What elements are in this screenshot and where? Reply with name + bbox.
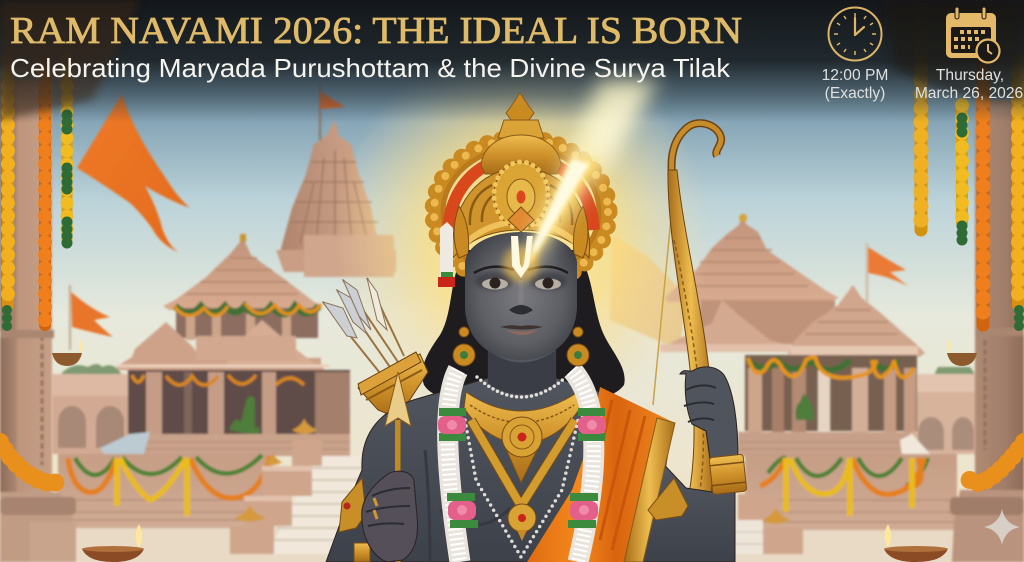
flag: tower top	[320, 84, 345, 140]
hair	[422, 250, 625, 398]
right top dark canopy	[885, 0, 1024, 100]
crown band	[458, 222, 584, 251]
marigold bunch left	[0, 442, 62, 483]
colonnade right temple	[745, 355, 917, 432]
lower pavilion and side roof	[116, 320, 330, 370]
platform right	[738, 432, 932, 456]
tilak mark	[503, 236, 539, 282]
crown scrollwork	[470, 185, 572, 225]
brass lamp right	[762, 508, 790, 524]
upper wall right	[700, 300, 835, 350]
main shikhara tower	[276, 120, 396, 277]
steps left	[267, 456, 362, 554]
diya lamp bottom right	[884, 524, 948, 562]
flower garland left	[438, 370, 478, 562]
gem sparkle watermark	[984, 509, 1020, 545]
marigold bunch right	[968, 442, 1024, 483]
bow and string	[653, 123, 721, 562]
short pearl choker	[477, 377, 566, 397]
halo scallop ring	[433, 138, 609, 286]
step posts right	[738, 494, 803, 554]
text: time: (Exactly)	[825, 85, 885, 102]
crown finial	[498, 93, 544, 138]
potted plant left	[229, 396, 260, 452]
top dark shade	[0, 0, 1024, 122]
face	[465, 232, 577, 360]
right hand	[680, 367, 738, 459]
crown side ornaments	[454, 206, 588, 258]
diya lamp small left	[52, 340, 82, 366]
flag: right	[867, 243, 908, 302]
text: date: Thursday,	[936, 67, 1004, 84]
left armband	[339, 478, 366, 532]
far building right	[905, 374, 977, 454]
left bracelet	[354, 543, 370, 562]
earrings	[453, 327, 589, 366]
arrows in quiver	[323, 278, 404, 378]
glow behind head	[332, 40, 712, 430]
eyebrows	[474, 267, 568, 273]
icon: clock	[828, 8, 882, 60]
text: date	[915, 67, 1023, 102]
chest shading	[425, 450, 510, 562]
diya lamp small right	[947, 339, 977, 366]
surya tilak beam	[522, 80, 660, 268]
flag: small left	[70, 285, 113, 350]
eyes	[482, 278, 561, 290]
centre side roof right	[660, 300, 795, 352]
left top brown canopy	[0, 0, 140, 120]
nose	[509, 280, 533, 314]
upper pavilion columns	[176, 308, 318, 340]
neck shading	[488, 350, 556, 394]
subtitle: Celebrating Maryada Purushottam & the Divine Surya Tilak	[10, 53, 731, 83]
marigold garlands right	[921, 10, 1019, 330]
lower garland left temple	[132, 375, 304, 385]
far trees right	[934, 367, 976, 375]
flag: large left	[77, 94, 190, 252]
right wrist bangle	[709, 454, 747, 495]
brass lamps left	[234, 418, 317, 522]
wall garland right	[760, 457, 928, 516]
diya lamp bottom left	[82, 524, 144, 562]
text: time: 12:00 PM	[822, 67, 888, 84]
main roof right	[664, 212, 839, 302]
right upper and forearm	[640, 455, 735, 562]
low wall left	[58, 454, 273, 528]
left pillar	[0, 80, 76, 562]
pearl strand	[465, 420, 578, 557]
temple: left complex	[52, 120, 396, 554]
orange drape	[527, 387, 675, 562]
crown dome	[481, 135, 561, 174]
low wall right	[745, 454, 957, 530]
upper garland left temple	[174, 303, 321, 316]
wall garland left	[68, 455, 270, 516]
right armband	[648, 478, 688, 520]
red crown arcs	[448, 165, 594, 230]
flower garland right	[568, 370, 606, 562]
marigold garlands left	[7, 60, 67, 328]
colonnade left temple	[128, 370, 350, 436]
far building left	[52, 374, 138, 454]
ground	[0, 527, 1024, 562]
lower V necklace	[471, 420, 575, 541]
platform left	[100, 432, 350, 456]
gold collar necklace	[464, 392, 580, 483]
temple: right complex	[610, 212, 977, 554]
text: time	[822, 67, 888, 102]
torso and left arm	[326, 345, 670, 562]
quiver	[358, 352, 428, 418]
crown centre jewel	[494, 162, 548, 232]
potted plant right	[795, 394, 817, 453]
back wash roof right	[610, 235, 686, 350]
right pillar	[950, 100, 1024, 562]
step posts left	[230, 440, 322, 554]
side roof right	[788, 285, 925, 357]
far trees left	[60, 364, 122, 375]
arrow in hand	[385, 372, 411, 562]
eye shadows	[475, 272, 567, 290]
steps right	[733, 520, 763, 554]
left hand rings	[374, 498, 377, 519]
upper pavilion roof	[163, 234, 321, 310]
title: RAM NAVAMI 2026: THE IDEAL IS BORN	[10, 10, 742, 52]
crown main body	[452, 168, 590, 258]
left hand	[362, 471, 417, 562]
text: date: March 26, 2026	[915, 85, 1023, 102]
mouth	[500, 325, 543, 335]
colonnade garland right	[748, 357, 914, 378]
icon: calendar	[946, 7, 1000, 62]
tassel	[438, 222, 455, 287]
